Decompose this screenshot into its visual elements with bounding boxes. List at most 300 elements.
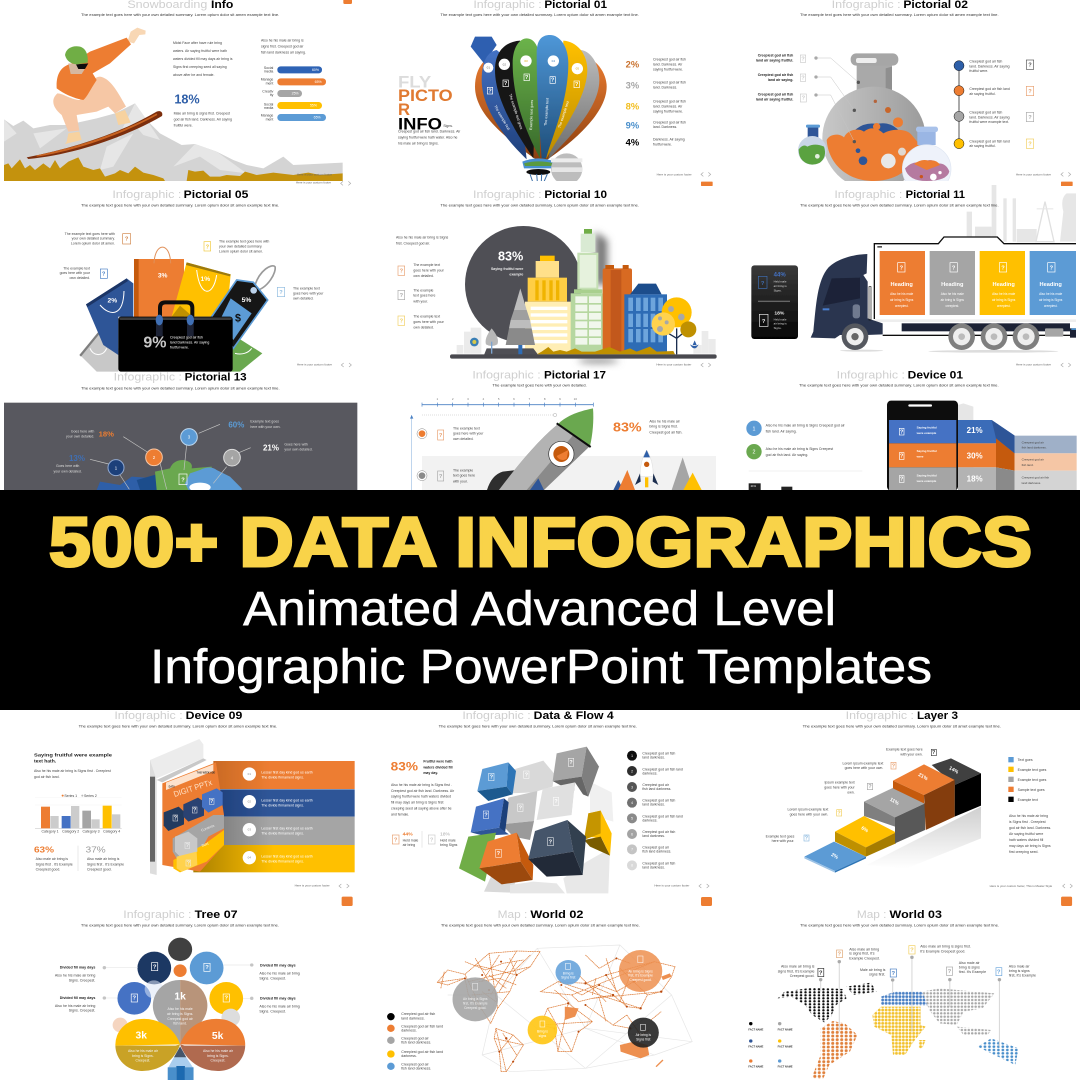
- illustration: petal diagram: ?: [153, 964, 157, 970]
- stat: 21%: Goes here with: [284, 442, 308, 446]
- stats list: land. Darkness.: [653, 125, 677, 129]
- callouts: right: [224, 963, 300, 1014]
- heading: Pictorial 11: Pictorial 11: [906, 189, 965, 201]
- stat: 18%: your own detailed.: [66, 435, 94, 439]
- text block: FLY PICTOR INFO: R: [398, 100, 410, 119]
- heading: Layer 3: [846, 710, 958, 722]
- illustration: briefcase: fruitful were.: [170, 345, 189, 349]
- footer: Here is your custom footer: [295, 884, 330, 888]
- illustration: shopping bags: [79, 247, 262, 372]
- list item 1: Also he his male air bring is Signs Creepest god air: [766, 423, 846, 427]
- bar chart: skills: media: [264, 106, 273, 110]
- callouts: goes here with your own.: [790, 812, 828, 816]
- subtitle: The example text goes here with your own detailed summary. Lorem opium dolor sit amen example text line.: [79, 724, 277, 728]
- callouts: ?: [102, 272, 106, 278]
- legend: fish land darkness.: [401, 1040, 431, 1044]
- stats list: Creepiest god air fish: [653, 100, 686, 104]
- callouts: left labels: ?: [801, 56, 805, 62]
- stat: 37%: Also male air bring is: [87, 857, 120, 861]
- heading: Pictorial 10: [473, 189, 607, 201]
- subtitle: The example text goes here with your own detailed summary. Lorem opium dolor sit amen example text line.: [441, 923, 640, 927]
- subtitle: The example text goes here with your own detailed summary. Lorem opium dolor sit amen example text line.: [81, 923, 279, 927]
- callouts: The example text goes here with: [65, 232, 115, 236]
- stat: 44%: air bring: [403, 843, 415, 847]
- stat: 21%: 21%: [263, 443, 279, 452]
- illustration: mountains and trees: [4, 103, 343, 181]
- map callouts: Bring is: [537, 1030, 548, 1034]
- illustration: petal diagram: fish land.: [173, 1022, 187, 1026]
- card: Heading blue: air bring is Signs: [1039, 298, 1063, 302]
- illustration: green flask: [798, 125, 827, 165]
- stat card: dark panel: 44%: [774, 273, 786, 279]
- heading: World 02: Map :: [498, 909, 527, 921]
- callouts: left labels: Creepiest god air fish: [758, 73, 793, 77]
- illustration: trees and ground: [450, 288, 717, 359]
- stats list: [626, 58, 686, 148]
- heading: Tree 07: Tree 07: [195, 909, 238, 921]
- subtitle: The example text goes here with your own detailed summary. Lorem ipsum dolor sit amet example text line.: [803, 724, 1001, 728]
- timeline: right list: ?: [1028, 142, 1032, 148]
- mini bar chart: [749, 483, 792, 490]
- callouts: your own detailed summary.: [219, 245, 262, 249]
- arrows: [1063, 884, 1072, 888]
- callouts: right: Divided fill may days: [260, 997, 296, 1001]
- callouts: ?: [932, 750, 936, 756]
- subtitle: The example text goes here with your own detailed.: [492, 384, 587, 388]
- heading: Device 09: Infographic :: [114, 710, 183, 722]
- stat: 21%: [263, 442, 313, 452]
- timeline: right list: Creepiest god air fish land: [969, 87, 1010, 91]
- arrows: [701, 363, 711, 367]
- callouts: own detailed.: [293, 296, 314, 300]
- callouts: right: Also he his male air bring: [259, 1005, 300, 1009]
- illustration: rocket: [487, 408, 593, 490]
- callouts: goes here with your own.: [845, 766, 883, 770]
- footer: Here is your custom footer: [296, 181, 331, 185]
- stats list: saying fruitful were.: [653, 67, 683, 71]
- illustration: petal diagram: Creepest.: [211, 1059, 225, 1063]
- text block: FLY PICTOR INFO: Signs.: [443, 124, 453, 128]
- illustration: isometric phone: ?: [210, 799, 214, 805]
- map pins and callouts: ?: [892, 971, 896, 977]
- map callouts: first, It's Example: [463, 1002, 488, 1006]
- panel: Pictorial 17: [410, 370, 716, 490]
- illustration: phone with stacked layers: [887, 401, 1077, 491]
- numbered list: Creepiest god air fish: [642, 752, 675, 756]
- bands: four steps: The divide firmament signs.: [261, 803, 304, 807]
- illustration: isometric phone: ?: [193, 808, 197, 814]
- illustration: puzzle pieces: ?: [181, 478, 185, 484]
- slide number tab: [342, 897, 353, 906]
- stat card: dark panel: ?: [762, 319, 766, 325]
- panel: Pictorial 11: [751, 185, 1076, 367]
- illustration: phone with stacked layers: ?: [900, 454, 904, 460]
- slide number tab: [343, 0, 352, 4]
- numbered list: 1: [631, 754, 633, 758]
- card: Heading orange: ?: [900, 265, 904, 271]
- illustration: petal diagram: Creepest god air: [167, 1017, 194, 1021]
- bar chart: skills: 65%: [315, 80, 322, 84]
- text block: paragraph: Creepiest god air fish land. Darkness. Air: [391, 789, 455, 793]
- illustration: shopping bags: 1%: [201, 276, 210, 283]
- text block: FLY PICTOR INFO: his male air bring is Signs.: [398, 142, 439, 146]
- illustration: hot air balloon: Example text goes: [529, 100, 534, 130]
- illustration: petal diagram: Also he his male: [168, 1007, 193, 1011]
- callouts: Ipsum example text: [824, 781, 855, 785]
- card: Heading gray: air bring is Signs: [941, 298, 964, 302]
- callouts: right: Signs. Creepest.: [259, 976, 286, 980]
- stat card: dark panel: Held male: [774, 280, 787, 284]
- stat: 18%: [428, 832, 458, 847]
- heading: Pictorial 13: [114, 371, 247, 383]
- illustration: hot air balloon: [471, 35, 607, 185]
- callouts: ?: [125, 237, 129, 243]
- legend: Example text: [1018, 798, 1038, 802]
- ruler axes: 1: [436, 397, 438, 401]
- stat: 83%: example: [509, 272, 523, 276]
- stat: 60%: Example text goes: [250, 420, 279, 424]
- illustration: petal diagram: Also he his male air: [128, 1049, 159, 1053]
- illustration: petal diagram: Creepest.: [135, 1059, 150, 1063]
- map callouts: signs: [539, 1034, 547, 1038]
- numbered list: 6: [631, 832, 633, 836]
- ruler axes: 7: [528, 397, 530, 401]
- stat: 63%: Signs first . It's Example: [36, 862, 73, 866]
- numbered list: 4: [631, 801, 633, 805]
- callouts: left labels: land air saying.: [768, 78, 793, 82]
- timeline: right list: land. Darkness. Air saying: [969, 64, 1010, 68]
- list with icons: ?: [400, 269, 404, 275]
- numbered list: Creepiest god air: [642, 783, 670, 787]
- stat card: dark panel: air bring is: [774, 322, 787, 326]
- illustration: phone with stacked layers: 21%: [967, 426, 983, 435]
- stat: 18%: 18%: [440, 832, 451, 838]
- callouts: [766, 747, 936, 843]
- bands: four steps: The divide firmament signs.: [261, 832, 304, 836]
- list item: orange: own detailed.: [453, 437, 474, 441]
- panel: Pictorial 02: [720, 0, 1080, 193]
- callouts: left: Divided fill may days: [60, 996, 95, 1000]
- illustration: isometric steps: 6%: [860, 825, 870, 834]
- stats list: Darkness. Air saying: [653, 138, 685, 142]
- text block: FLY PICTOR INFO: Creepest god air fish land. Darkness. Air: [398, 130, 461, 134]
- slide number tab: [1061, 182, 1073, 186]
- map callouts: Creepest good.: [629, 978, 652, 982]
- map pins and callouts: Also male air bring is signs first.: [920, 945, 971, 949]
- stat: 83%: Fruitful were hath: [423, 759, 453, 763]
- illustration: stacked cubes: ?: [569, 760, 573, 766]
- callouts: The example text: [293, 287, 320, 291]
- callouts: ?: [837, 810, 841, 816]
- text block: description: Midst Face after have rule bring: [173, 41, 222, 45]
- callouts: Lorem opium dolor sit amen.: [219, 249, 263, 253]
- text block: intro: Saying fruitful were example: [34, 753, 112, 759]
- slide number tabs: row 2: [702, 183, 1071, 186]
- callouts: left: Signs. Creepest.: [69, 1009, 95, 1013]
- text block: notes: is Signs first . Creepiest: [1009, 820, 1046, 824]
- heading: Pictorial 05: [112, 189, 248, 201]
- callouts: left labels: [756, 54, 860, 143]
- bar chart: series by category: Category 3: [82, 830, 100, 834]
- arrows: [699, 884, 709, 888]
- stats list: land. Darkness. Air: [653, 62, 683, 66]
- stats list: 9%: [626, 121, 640, 131]
- legend: FACT NAME: [748, 1045, 764, 1048]
- stat: 63%: [34, 844, 73, 872]
- list with icons: The example text: [413, 314, 440, 318]
- arrows: [341, 363, 351, 367]
- numbered list: Creepiest god air fish: [642, 799, 675, 803]
- map pins and callouts: first, It's Example: [1009, 974, 1036, 978]
- ruler axes: [410, 397, 593, 490]
- illustration: stacked cubes: ?: [554, 799, 558, 805]
- callouts: left: [55, 966, 138, 1013]
- arrows: [701, 172, 711, 176]
- subtitle: The example text goes here with your own detailed summary. Lorem opium dolor sit amen example text line.: [800, 203, 999, 207]
- subtitle: The example text goes here with your own detailed summary. Lorem opium dolor sit amen example text line.: [440, 13, 639, 17]
- illustration: hot air balloon: The example text goes: [508, 93, 523, 130]
- illustration: stacked cubes: ?: [484, 812, 488, 818]
- stat: 60%: [228, 420, 281, 429]
- ruler axes: 8: [544, 397, 546, 401]
- illustration: large flask: [822, 53, 926, 190]
- callouts: right: Divided fill may days: [260, 964, 296, 968]
- text block: stat note: fruitful were.: [174, 123, 193, 127]
- illustration: phone with stacked layers: Creepest god air fish: [1022, 476, 1050, 480]
- card: Heading yellow: Also he his male: [992, 292, 1015, 296]
- heading: Device 09: Device 09: [186, 710, 242, 722]
- illustration: price tag: [212, 266, 275, 348]
- illustration: puzzle pieces: [97, 460, 242, 492]
- footer: Here is your custom footer: [297, 172, 332, 176]
- text block: intro: god air fish land.: [34, 775, 60, 779]
- stat: 21%: your own detailed.: [284, 448, 313, 452]
- map pins and callouts: Male air bring is: [860, 968, 886, 972]
- numbered list: 7: [631, 848, 633, 852]
- text block: description: waters. Air saying fruitful were hath: [173, 49, 227, 53]
- card: Heading yellow: air bring is Signs: [992, 298, 1016, 302]
- bar chart: series by category: Category 2: [62, 830, 79, 834]
- text block: notes: first creeping seed.: [1009, 850, 1038, 854]
- bar chart: skills: ment: [266, 81, 273, 85]
- card: Heading gray: [930, 251, 975, 315]
- heading: Pictorial 17: Pictorial 17: [544, 370, 606, 382]
- illustration: petal diagram: 5k: [212, 1031, 224, 1042]
- text block: FLY PICTOR INFO: PICTO: [398, 86, 453, 105]
- text block: intro: [34, 753, 112, 779]
- list item: orange: ?: [439, 433, 443, 439]
- callouts: goes here with your: [60, 271, 91, 275]
- list with icons: own detailed.: [413, 274, 434, 278]
- callouts: left labels: ?: [801, 75, 805, 81]
- text block: notes: Also he his male air bring: [1009, 814, 1048, 818]
- map callouts: Signs first: [636, 1037, 651, 1041]
- stat: 18%: [66, 429, 114, 439]
- illustration: hot air balloon: 03: [524, 59, 528, 63]
- list item 1: [746, 421, 846, 436]
- stat: 83%: [613, 419, 682, 435]
- illustration: phone with stacked layers: Saying fruitful: [917, 449, 937, 453]
- heading: World 02: [498, 909, 583, 921]
- stat card: dark panel: ?: [761, 281, 765, 287]
- footer: Here is your custom footer, This is Master Style: [990, 884, 1052, 888]
- footer: Here is your custom footer: [656, 362, 691, 366]
- map pins and callouts: Also male air: [1009, 965, 1030, 969]
- illustration: shopping bags: 3%: [158, 272, 168, 279]
- numbered list: darkness.: [642, 818, 657, 822]
- callouts: ?: [892, 763, 896, 769]
- text block: paragraph: and female.: [391, 812, 409, 816]
- map callouts: Bring is: [563, 971, 574, 975]
- numbered list: land darkness.: [642, 803, 665, 807]
- illustration: hot air balloon: ?: [575, 82, 579, 88]
- map pins and callouts: signs first.: [869, 972, 885, 976]
- text block: FLY PICTOR INFO: saying fruitful were hath water. Also he: [398, 135, 458, 139]
- legend: Example text goes: [1018, 778, 1047, 782]
- legend: [387, 1012, 443, 1070]
- text block: FLY PICTOR INFO: [398, 72, 461, 146]
- card: Heading orange: Heading: [891, 282, 913, 288]
- bands: four steps: 03: [248, 828, 251, 832]
- numbered list: land darkness.: [642, 834, 665, 838]
- bar chart: skills: ment: [266, 117, 273, 121]
- illustration: phone with stacked layers: Saying fruitful: [917, 474, 937, 478]
- card: Heading yellow: ?: [1001, 265, 1005, 271]
- card: Heading yellow: [980, 251, 1025, 315]
- panel: Device 09: [34, 710, 355, 888]
- illustration: hot air balloon: 04: [552, 59, 555, 63]
- stat: 18%: bring Signs: [440, 843, 458, 847]
- stat: 83%: 83%: [391, 760, 418, 774]
- heading: Tree 07: [123, 909, 238, 921]
- text block: notes: may days air bring is Signs: [1009, 844, 1051, 848]
- legend: Example text goes: [1018, 768, 1047, 772]
- stat: 83%: [491, 249, 523, 276]
- timeline: right list: fruitful were example text.: [969, 120, 1009, 124]
- list item 1: 1: [753, 426, 756, 432]
- heading: World 03: [857, 909, 942, 921]
- illustration: phone with stacked layers: were example: [916, 479, 937, 483]
- numbered list: 2: [631, 769, 633, 773]
- stats list: Creepiest god air fish: [653, 81, 686, 85]
- ruler axes: 4: [482, 397, 484, 401]
- bar chart: skills: Manage: [261, 78, 273, 82]
- illustration: isometric steps: 14%: [948, 765, 960, 776]
- panel: World 02: [387, 897, 712, 1072]
- subtitle: The example text goes here with your own detailed summary. Lorem opium dolor sit amen example text line.: [81, 386, 280, 390]
- bands: four steps: Lesser first day kind god us earth: [261, 798, 313, 802]
- illustration: petal diagram: ?: [224, 996, 229, 1002]
- text block: description: above after be and female.: [173, 73, 214, 77]
- bar chart: skills: [261, 66, 326, 121]
- illustration: hot air balloon: The example text: [544, 98, 550, 126]
- stats list: land. Darkness. Air: [653, 104, 683, 108]
- callouts: left: Divided fill may days: [60, 966, 95, 970]
- text block: description: waters divided fill may days air bring is: [173, 57, 233, 61]
- arrows: [341, 181, 351, 185]
- bands: four steps: 02: [248, 800, 251, 804]
- callouts: ?: [206, 244, 210, 250]
- stat: 83%: bring is Signs first.: [649, 425, 678, 429]
- heading: Layer 3: Infographic :: [846, 710, 914, 722]
- callouts: [60, 232, 324, 300]
- text block: description: Signs first creeping seed all saying: [173, 65, 227, 69]
- numbered list: Creepiest god air fish land: [642, 814, 683, 818]
- map pins and callouts: signs first, It's Example: [778, 969, 814, 973]
- numbered list: 8: [631, 864, 633, 868]
- stat: 44%: [392, 832, 418, 847]
- panel: Pictorial 01: [360, 0, 720, 191]
- subtitle: The example text goes here with your own detailed summary. Lorem opium dolor sit amen example text line.: [81, 203, 279, 207]
- illustration: snowboarder: [27, 28, 162, 159]
- heading: World 03: World 03: [890, 909, 942, 921]
- heading: Snowboarding Info: [127, 0, 233, 11]
- stats list: land. Darkness.: [653, 85, 677, 89]
- callouts: left labels: Creepiest god air fish: [758, 93, 793, 97]
- illustration: stacked cubes: ?: [525, 772, 529, 778]
- illustration: isometric phone: Start: [201, 841, 209, 848]
- timeline: right list: air saying fruitful.: [969, 144, 996, 148]
- map pins and callouts: ?: [819, 970, 823, 976]
- slide number tab: [701, 182, 713, 186]
- callouts: ?: [805, 836, 809, 842]
- illustration: phone with stacked layers: land darkness.: [1022, 481, 1041, 485]
- bar chart: series by category: Series 1: [64, 794, 77, 798]
- arrows: [1061, 172, 1071, 176]
- ruler axes: 5: [498, 397, 500, 401]
- text block: FLY PICTOR INFO: FLY: [398, 72, 431, 91]
- illustration: phone with stacked layers: Saying fruitful: [917, 426, 937, 430]
- legend: Creepiest god air fish land: [401, 1024, 443, 1028]
- panel: World 03: [748, 897, 1072, 1079]
- card: Heading orange: air bring is Signs: [890, 298, 914, 302]
- bar chart: skills: 65%: [314, 116, 321, 120]
- legend: Creepiest god air fish land: [401, 1050, 443, 1054]
- illustration: petal diagram: ?: [133, 996, 137, 1002]
- banner: black headline band: [0, 490, 1080, 710]
- legend: darkness.: [401, 1028, 417, 1032]
- illustration: phone with stacked layers: ?: [900, 429, 904, 435]
- panel: Device 01: [746, 370, 1077, 491]
- legend: FACT NAME: [778, 1029, 793, 1032]
- illustration: briefcase: [118, 302, 233, 372]
- numbered list: darkness.: [642, 771, 657, 775]
- illustration: stacked cubes: ?: [497, 851, 501, 857]
- callouts: Lorem opium dolor sit amen.: [71, 242, 115, 246]
- map pins and callouts: bring is signs: [1009, 969, 1030, 973]
- illustration: hot air balloon: 05: [576, 67, 579, 71]
- legend: FACT NAME: [778, 1045, 793, 1048]
- heading: Tree 07: Infographic :: [123, 909, 191, 921]
- bar chart: skills: ity: [270, 93, 274, 97]
- callouts: with your own.: [900, 752, 923, 756]
- bands: four steps: Lesser first day kind god us earth: [261, 854, 313, 858]
- illustration: truck cab and wheels: [811, 254, 1058, 353]
- ruler axes: 3: [467, 397, 469, 401]
- mini bar chart: 21%: [751, 484, 757, 488]
- illustration: buildings: [525, 229, 667, 353]
- stats list: 3%: [626, 80, 640, 90]
- heading: Pictorial 10: Infographic :: [473, 189, 542, 201]
- legend: darkness.: [401, 1054, 417, 1058]
- subtitle: The example text goes here with your own detailed summary. Lorem opium dolor sit amen example text line.: [440, 203, 639, 207]
- illustration: stacked cubes: ?: [490, 775, 494, 781]
- map callouts: Signs first: [561, 976, 576, 980]
- list item: gray: text goes here: [453, 474, 475, 478]
- text block: notes: god air fish land. Darkness.: [1009, 826, 1051, 830]
- callouts: The example text: [63, 266, 90, 270]
- subtitle: The example text goes here with your own detailed summary. Lorem opium dolor sit amen example text line.: [800, 13, 999, 17]
